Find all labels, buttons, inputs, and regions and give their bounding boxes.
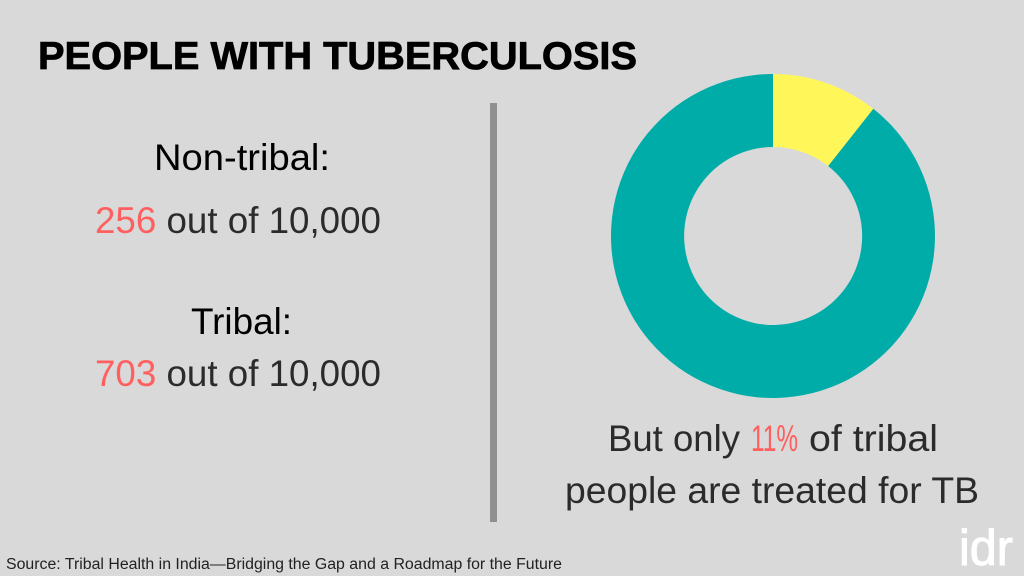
logo: idr: idr	[959, 520, 1013, 576]
donut chart: 11% treated	[611, 74, 935, 398]
caption highlighted value: 11%	[751, 418, 798, 459]
donut segment: untreated	[611, 74, 935, 398]
stat: non-tribal rate: 256 out of 10,000	[95, 200, 381, 241]
label: tribal: Tribal:	[191, 301, 292, 342]
caption line 2: people are treated for TB	[565, 470, 979, 511]
vertical divider	[490, 103, 497, 522]
caption line 1 start: But only	[608, 418, 740, 459]
caption: treatment rate	[565, 418, 979, 511]
source note: Source: Tribal Health in India—Bridging the Gap and a Roadmap for the Future	[6, 556, 562, 573]
donut segment: treated 11%	[773, 74, 873, 166]
panel: tribal vs non-tribal rates	[95, 137, 381, 394]
stat: tribal rate: 703 out of 10,000	[95, 353, 381, 394]
caption line 1 end: of tribal	[809, 418, 938, 459]
title: PEOPLE WITH TUBERCULOSIS	[38, 35, 637, 78]
label: non-tribal: Non-tribal:	[154, 137, 330, 178]
